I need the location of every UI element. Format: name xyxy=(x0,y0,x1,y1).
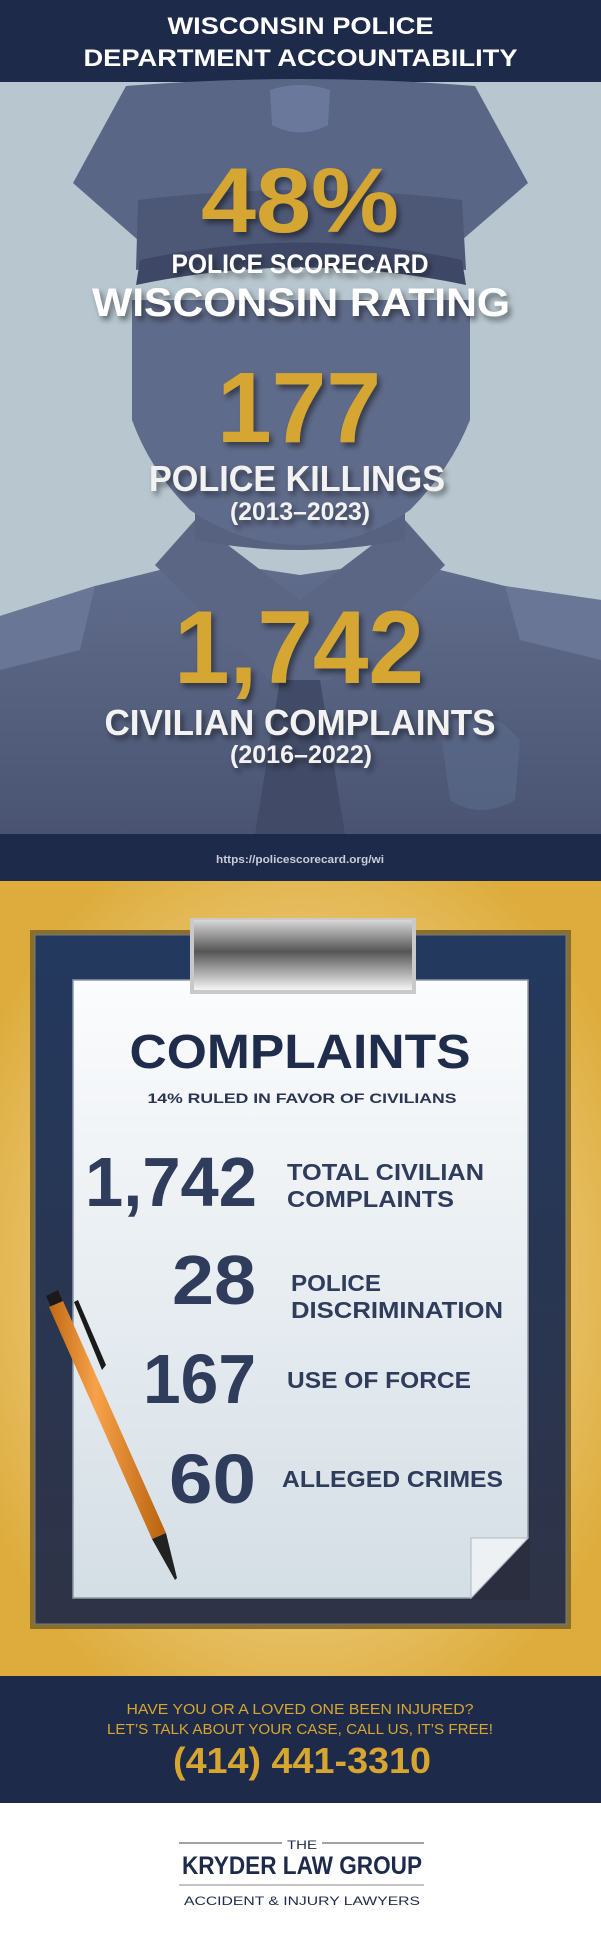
logo xyxy=(179,1838,424,1908)
heading: complaints xyxy=(130,1026,470,1106)
stat: 48% rating: WISCONSIN RATING xyxy=(92,281,510,325)
logo: ACCIDENT & INJURY LAWYERS xyxy=(184,1894,420,1908)
stat row: total complaints xyxy=(85,1143,484,1221)
footer: call to action: (414) 441-3310 xyxy=(173,1740,431,1781)
panel: police officer silhouette xyxy=(0,79,601,834)
stat row: total complaints: 1,742 xyxy=(85,1143,257,1221)
stat row: discrimination: POLICE xyxy=(291,1270,381,1296)
stat: 1,742 civilian complaints: (2016–2022) xyxy=(230,741,372,769)
stat: 177 police killings: POLICE KILLINGS xyxy=(149,458,445,499)
header xyxy=(0,0,601,82)
stat row: alleged crimes: ALLEGED CRIMES xyxy=(282,1466,503,1492)
heading: complaints: COMPLAINTS xyxy=(130,1026,470,1079)
icon: pen xyxy=(46,1290,177,1580)
stat row: alleged crimes xyxy=(169,1440,503,1518)
stat: 177 police killings: (2013–2023) xyxy=(230,498,370,526)
footer: call to action xyxy=(0,1676,601,1803)
stat: 1,742 civilian complaints: CIVILIAN COMPLAINTS xyxy=(104,702,496,743)
stat: 48% rating: 48% xyxy=(201,150,399,252)
source url bar: https://policescorecard.org/wi xyxy=(216,854,384,866)
stat row: use of force: USE OF FORCE xyxy=(287,1367,471,1393)
stat: 1,742 civilian complaints xyxy=(104,590,496,769)
stat: 177 police killings: 177 xyxy=(217,352,381,464)
stat: 48% rating: POLICE SCORECARD xyxy=(172,249,428,279)
clipboard xyxy=(30,918,571,1629)
stat row: total complaints: COMPLAINTS xyxy=(287,1186,454,1212)
stat row: use of force: 167 xyxy=(143,1340,256,1418)
stat row: discrimination: DISCRIMINATION xyxy=(291,1297,503,1323)
stat: 1,742 civilian complaints: 1,742 xyxy=(174,590,424,706)
stat: 48% rating xyxy=(92,150,510,325)
stat row: alleged crimes: 60 xyxy=(169,1440,256,1518)
logo: THE xyxy=(287,1838,317,1852)
footer: call to action: HAVE YOU OR A LOVED ONE BEEN INJURED? xyxy=(126,1701,474,1718)
footer: call to action: LET’S TALK ABOUT YOUR CASE, CALL US, IT’S FREE! xyxy=(107,1721,493,1738)
stat: 177 police killings xyxy=(149,352,445,526)
header: DEPARTMENT ACCOUNTABILITY xyxy=(84,45,518,72)
stat row: total complaints: TOTAL CIVILIAN xyxy=(287,1159,484,1185)
stat row: use of force xyxy=(143,1340,471,1418)
header: WISCONSIN POLICE xyxy=(168,13,434,40)
stat row: discrimination xyxy=(172,1241,503,1323)
panel: gold background xyxy=(0,881,601,1676)
logo: KRYDER LAW GROUP xyxy=(182,1852,422,1880)
stat row: discrimination: 28 xyxy=(172,1241,256,1319)
source url bar xyxy=(0,834,601,881)
heading: complaints: 14% RULED IN FAVOR OF CIVILIANS xyxy=(148,1090,456,1106)
